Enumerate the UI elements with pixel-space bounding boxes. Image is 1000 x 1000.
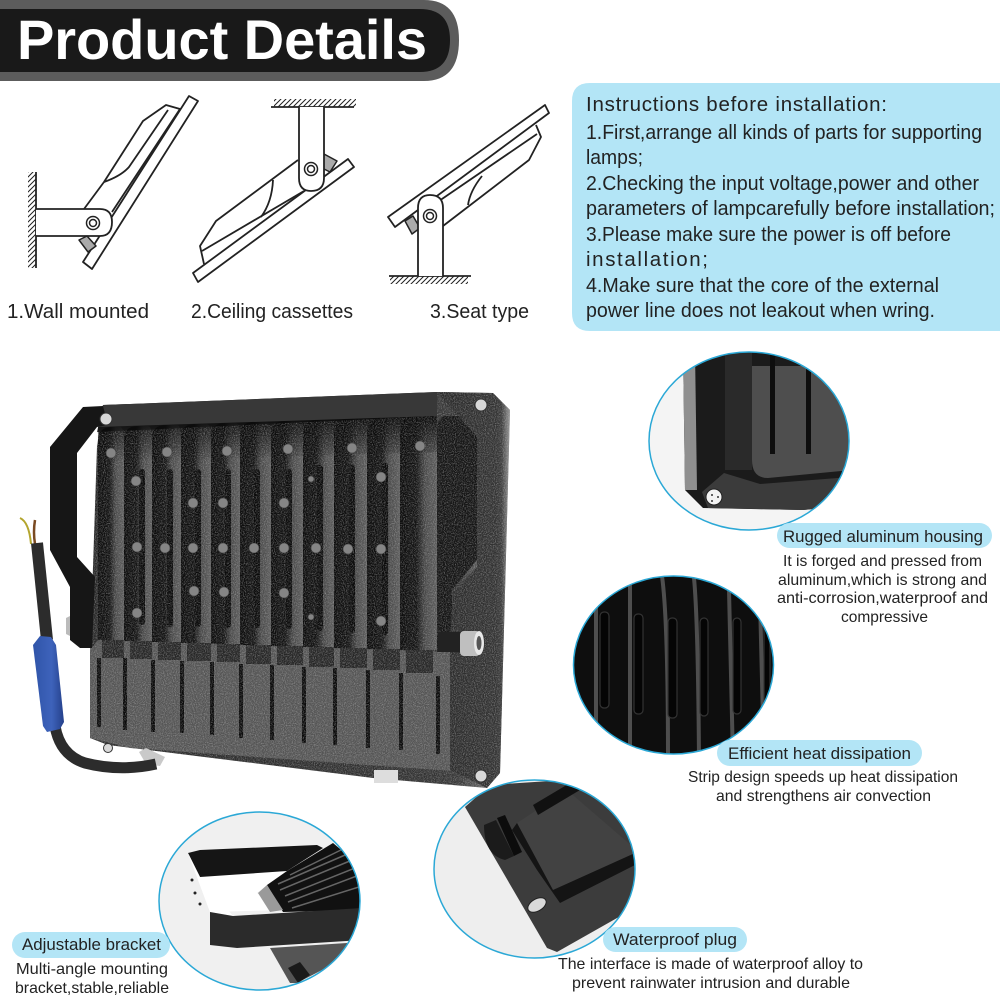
detail circle: rugged housing — [648, 351, 850, 531]
instructions text: 3.Please make sure the power is off before — [586, 223, 951, 246]
callout: adjustable bracket: Multi-angle mounting — [16, 961, 168, 978]
instructions text: 2.Checking the input voltage,power and other — [586, 172, 979, 195]
mounting labels: 2.Ceiling cassettes — [191, 301, 353, 323]
detail circle: heat dissipation — [570, 570, 780, 760]
callout: waterproof plug: The interface is made of waterproof alloy to — [558, 956, 863, 973]
callout: adjustable bracket: Adjustable bracket — [22, 935, 161, 954]
callout: adjustable bracket: bracket,stable,reliable — [15, 980, 169, 997]
title text: Product Details — [17, 8, 427, 71]
power cable — [20, 518, 156, 768]
instructions text: 1.First,arrange all kinds of parts for supporting — [586, 121, 982, 144]
callout: efficient heat dissipation: and strengthens air convection — [716, 788, 931, 805]
mounting labels — [7, 301, 529, 323]
detail circle: waterproof plug — [430, 775, 640, 962]
instructions text: installation; — [586, 248, 708, 271]
diagram: seat type — [388, 105, 549, 284]
instructions text — [586, 93, 995, 322]
instructions text: Instructions before installation: — [586, 93, 887, 116]
callout: efficient heat dissipation — [688, 740, 958, 805]
callout: rugged aluminum housing: compressive — [841, 609, 928, 626]
side bolt — [438, 631, 484, 656]
rivets — [106, 441, 425, 626]
callout: rugged aluminum housing: anti-corrosion,waterproof and — [777, 590, 988, 607]
callout: efficient heat dissipation: Strip design speeds up heat dissipation — [688, 769, 958, 786]
instructions text: lamps; — [586, 146, 643, 169]
detail circle: adjustable bracket — [155, 808, 365, 994]
instructions text: 4.Make sure that the core of the external — [586, 274, 939, 297]
callout: rugged aluminum housing — [777, 523, 992, 626]
right bracket and screw bosses — [437, 392, 510, 788]
diagram: wall mounted — [28, 96, 198, 269]
bottom clips — [139, 748, 165, 766]
grain texture — [85, 385, 515, 795]
product photo: floodlight back — [20, 385, 515, 795]
callout: waterproof plug — [558, 927, 863, 992]
handle bracket — [50, 406, 108, 648]
callout: rugged aluminum housing: aluminum,which is strong and — [778, 572, 987, 589]
callout: rugged aluminum housing: It is forged and pressed from — [783, 553, 982, 570]
callout: waterproof plug: Waterproof plug — [613, 930, 737, 949]
fin slots — [142, 466, 385, 632]
housing plate — [90, 392, 510, 788]
callout: adjustable bracket — [12, 932, 170, 997]
bracket bolt stub — [66, 616, 70, 636]
mounting labels: 3.Seat type — [430, 301, 529, 323]
panel: installation instructions — [572, 83, 1000, 331]
title banner — [0, 0, 459, 81]
callout: efficient heat dissipation: Efficient heat dissipation — [728, 744, 911, 763]
mounting labels: 1.Wall mounted — [7, 301, 149, 323]
diagram: ceiling cassettes — [193, 99, 356, 282]
callout: waterproof plug: prevent rainwater intrusion and durable — [572, 975, 850, 992]
instructions text: parameters of lampcarefully before installation; — [586, 197, 995, 220]
instructions text: power line does not leakout when wring. — [586, 299, 935, 322]
screws — [100, 399, 487, 782]
heat sink fins — [90, 416, 477, 771]
blue connector — [33, 636, 64, 732]
callout: rugged aluminum housing: Rugged aluminum housing — [783, 527, 983, 546]
